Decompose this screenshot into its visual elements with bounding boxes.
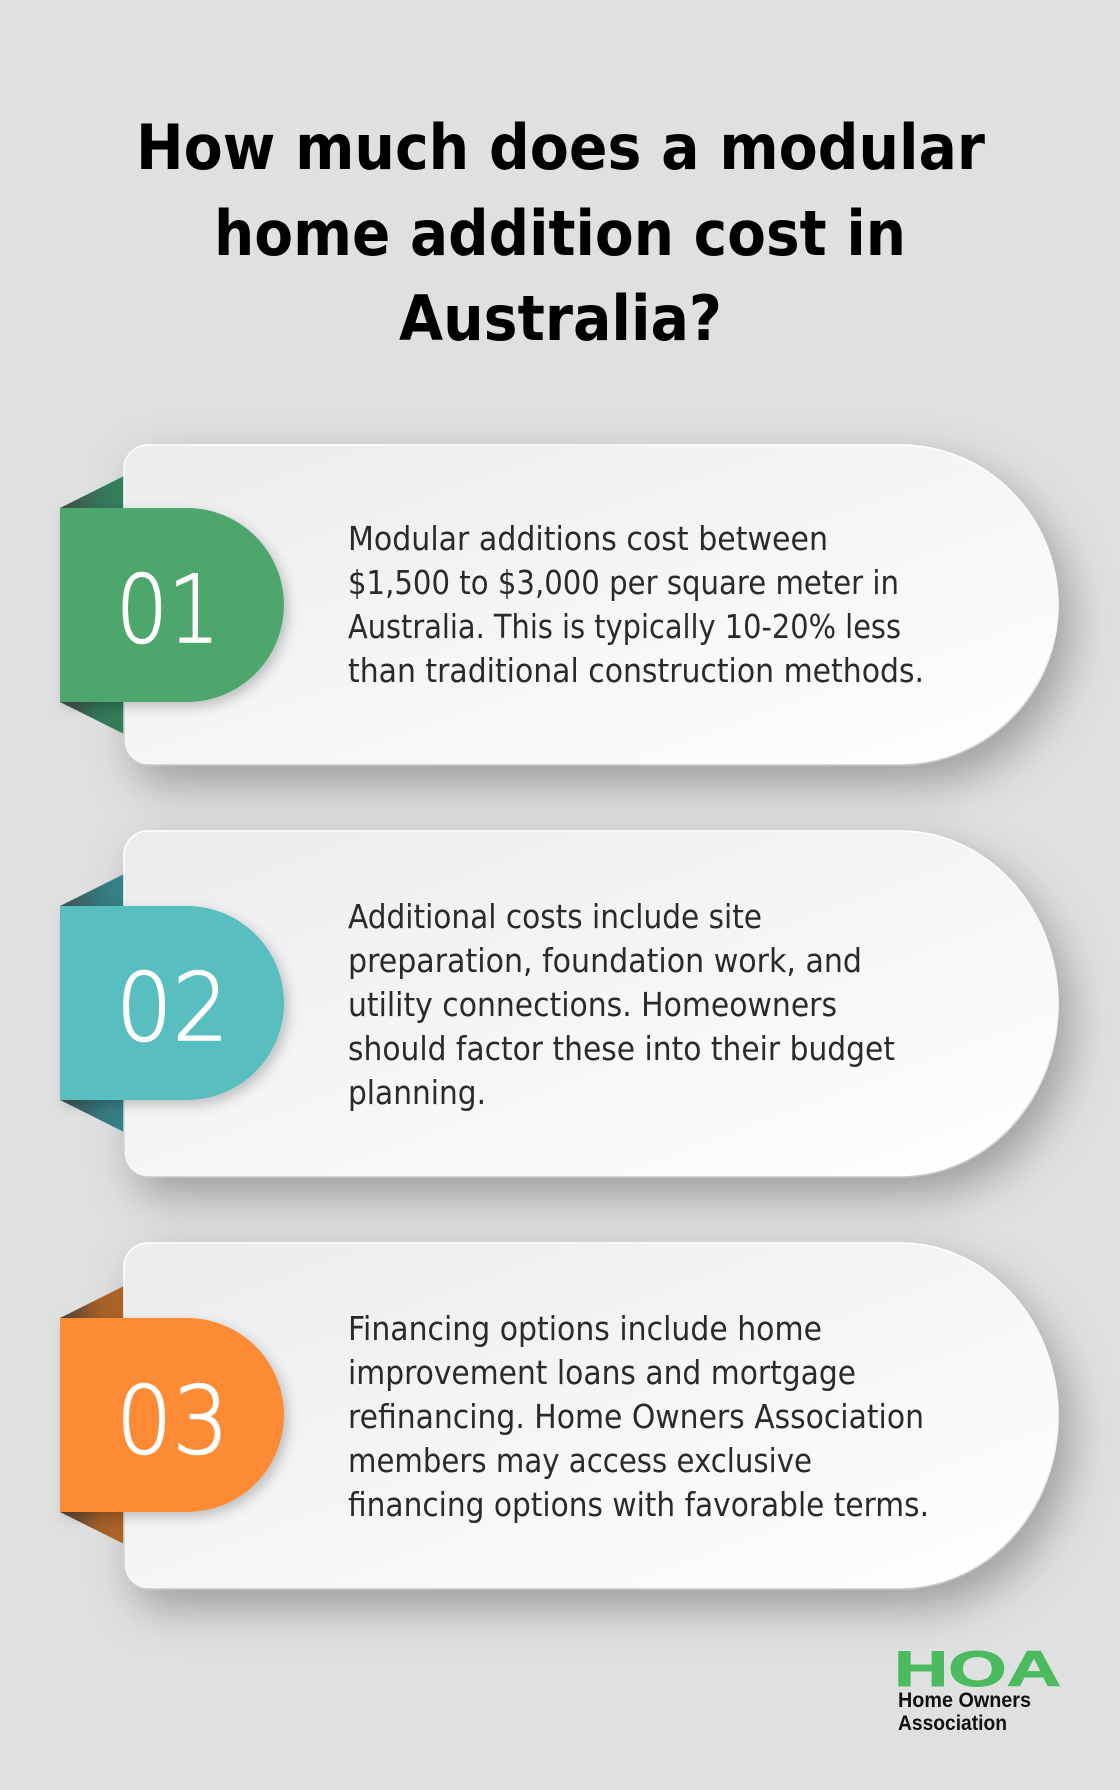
ribbon fold: step 3 xyxy=(60,1286,124,1544)
text: step 1: Modular additions cost between xyxy=(348,520,828,558)
number: 01: 01 xyxy=(116,556,220,665)
logo wordmark xyxy=(898,1689,1031,1735)
card: step 2 xyxy=(124,831,1058,1177)
text: step 3: refinancing. Home Owners Association xyxy=(348,1398,924,1436)
text: step 1: Australia. This is typically 10-20% less xyxy=(348,608,901,646)
logo wordmark: Association xyxy=(898,1712,1007,1735)
panel: step 1 xyxy=(60,445,1058,765)
text: step 2: preparation, foundation work, and xyxy=(348,942,862,980)
text: step 2: should factor these into their budget xyxy=(348,1030,895,1068)
text: step 3 xyxy=(348,1310,929,1524)
number: 03: 03 xyxy=(116,1367,229,1476)
panel: step 3 xyxy=(60,1243,1058,1589)
text: step 3: improvement loans and mortgage xyxy=(348,1354,856,1392)
title: Australia? xyxy=(399,282,722,355)
number badge: step 1 xyxy=(60,508,284,702)
card: step 3 xyxy=(124,1243,1058,1589)
number badge: step 3 xyxy=(60,1318,284,1512)
logo mark: HOA xyxy=(894,1641,1061,1697)
text: step 1: than traditional construction methods. xyxy=(348,652,924,690)
logo wordmark: Home Owners xyxy=(898,1689,1031,1712)
ribbon fold: step 2 xyxy=(60,874,124,1132)
text: step 2 xyxy=(348,898,895,1112)
logo: HOA xyxy=(894,1641,1061,1735)
title: home addition cost in xyxy=(214,197,906,270)
text: step 3: members may access exclusive xyxy=(348,1442,812,1480)
text: step 1 xyxy=(348,520,924,690)
number: 02: 02 xyxy=(116,954,229,1063)
title: How much does a modular xyxy=(136,111,985,184)
card: step 1 xyxy=(124,445,1058,765)
number badge: step 2 xyxy=(60,906,284,1100)
text: step 2: utility connections. Homeowners xyxy=(348,986,837,1024)
panel: step 2 xyxy=(60,831,1058,1177)
text: step 3: financing options with favorable terms. xyxy=(348,1486,929,1524)
text: step 2: Additional costs include site xyxy=(348,898,762,936)
text: step 2: planning. xyxy=(348,1074,486,1112)
text: step 3: Financing options include home xyxy=(348,1310,822,1348)
title xyxy=(136,111,985,355)
text: step 1: $1,500 to $3,000 per square meter in xyxy=(348,564,899,602)
ribbon fold: step 1 xyxy=(60,476,124,734)
